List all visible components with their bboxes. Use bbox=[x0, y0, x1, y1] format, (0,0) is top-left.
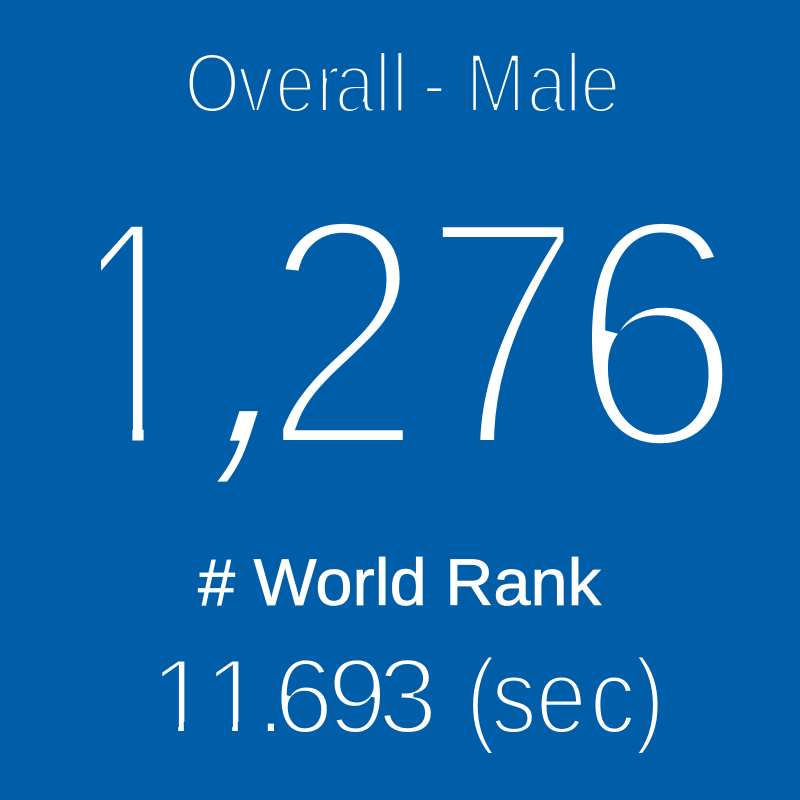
metric value bbox=[150, 636, 665, 757]
metric value: (sec) bbox=[466, 637, 665, 757]
metric value: 11.693 bbox=[150, 636, 438, 756]
title: Overall - Male bbox=[184, 35, 620, 130]
big number: 2 bbox=[262, 149, 424, 519]
big number: 1 bbox=[77, 149, 191, 518]
metric label: # World Rank bbox=[198, 545, 602, 619]
big number: 7 bbox=[421, 149, 585, 518]
big number: 6 bbox=[569, 149, 743, 518]
big number: , bbox=[183, 154, 364, 512]
big number bbox=[77, 149, 743, 519]
